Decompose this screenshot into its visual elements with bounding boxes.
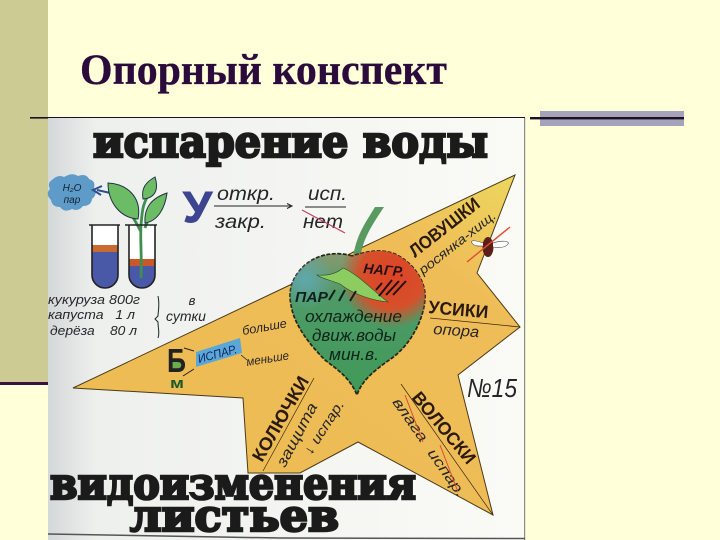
formula: stomata open / closed (183, 183, 347, 233)
label: hairs (389, 384, 493, 515)
panel: scanned textbook page (48, 117, 525, 540)
letter У: У (183, 183, 213, 232)
left side band (0, 0, 48, 384)
list: daily water evaporation: в (189, 293, 196, 308)
list: daily water evaporation: сутки (166, 308, 206, 324)
formula: stomata open / closed: исп. (308, 184, 347, 205)
icon: plant in test tube (108, 177, 167, 288)
label: tendrils: УСИКИ (428, 297, 489, 322)
callout: more / less evaporation: больше (241, 316, 288, 338)
label: hairs: ВОЛОСКИ (408, 388, 480, 468)
arrow: vapour from plant to cloud (93, 186, 115, 195)
heading: evaporation of water: испарение воды (93, 117, 488, 168)
icon: leaf stem (353, 207, 384, 260)
panel: yellow star of leaf modifications (73, 175, 520, 515)
icon: water vapour cloud: Н₂О (63, 183, 82, 194)
list: daily water evaporation: кукуруза 800г (48, 292, 141, 307)
icon: water vapour cloud (48, 174, 96, 211)
diagram: central leaf: ПАР (295, 289, 329, 306)
icon: water vapour cloud: пар (64, 195, 81, 206)
label: number 15: №15 (467, 373, 517, 403)
callout: more / less evaporation: ИСПАР. (196, 342, 238, 366)
callout: more / less evaporation: Б (167, 342, 186, 379)
callout: more / less evaporation (167, 316, 290, 392)
formula: stomata open / closed: закр. (214, 212, 266, 233)
label: spines: ↓ испар. (300, 397, 347, 458)
list: daily water evaporation (48, 292, 206, 338)
label: spines: КОЛЮЧКИ (248, 373, 313, 465)
icon: left test tube (89, 225, 120, 288)
diagram: central leaf: движ.воды (312, 327, 396, 345)
label: hairs: испар. (424, 446, 468, 500)
label: traps: ЛОВУШКИ (405, 194, 484, 261)
header rule left (30, 117, 525, 119)
label: traps (405, 194, 499, 278)
list: daily water evaporation: капуста 1 л (48, 307, 136, 322)
decorative gray bar (530, 111, 684, 126)
diagram: central leaf: мин.в. (329, 346, 379, 364)
label: traps: росянка-хищ. (415, 208, 499, 278)
label: spines: защита (273, 400, 322, 471)
heading: modifications of leaves: видоизменения (50, 459, 416, 510)
label: spines (248, 373, 347, 471)
title: Опорный конспект (80, 47, 447, 94)
label: tendrils: опора (433, 321, 480, 341)
diagram: central leaf (290, 251, 425, 395)
formula: stomata open / closed: нет (303, 212, 343, 233)
label: tendrils (428, 297, 520, 341)
label: hairs: влага (389, 395, 431, 445)
leaf labels: НАГР. (363, 260, 405, 280)
list: daily water evaporation: дерёза 80 л (50, 323, 138, 338)
formula: stomata open / closed: откр. (217, 184, 275, 205)
callout: more / less evaporation: меньше (245, 348, 290, 369)
band bottom line (0, 382, 48, 385)
heading: modifications of leaves (50, 459, 416, 540)
icon: crossed out insect (467, 227, 510, 262)
small leaf blade (317, 268, 388, 302)
callout: more / less evaporation: м (170, 375, 184, 392)
diagram: central leaf: охлаждение (305, 308, 402, 326)
